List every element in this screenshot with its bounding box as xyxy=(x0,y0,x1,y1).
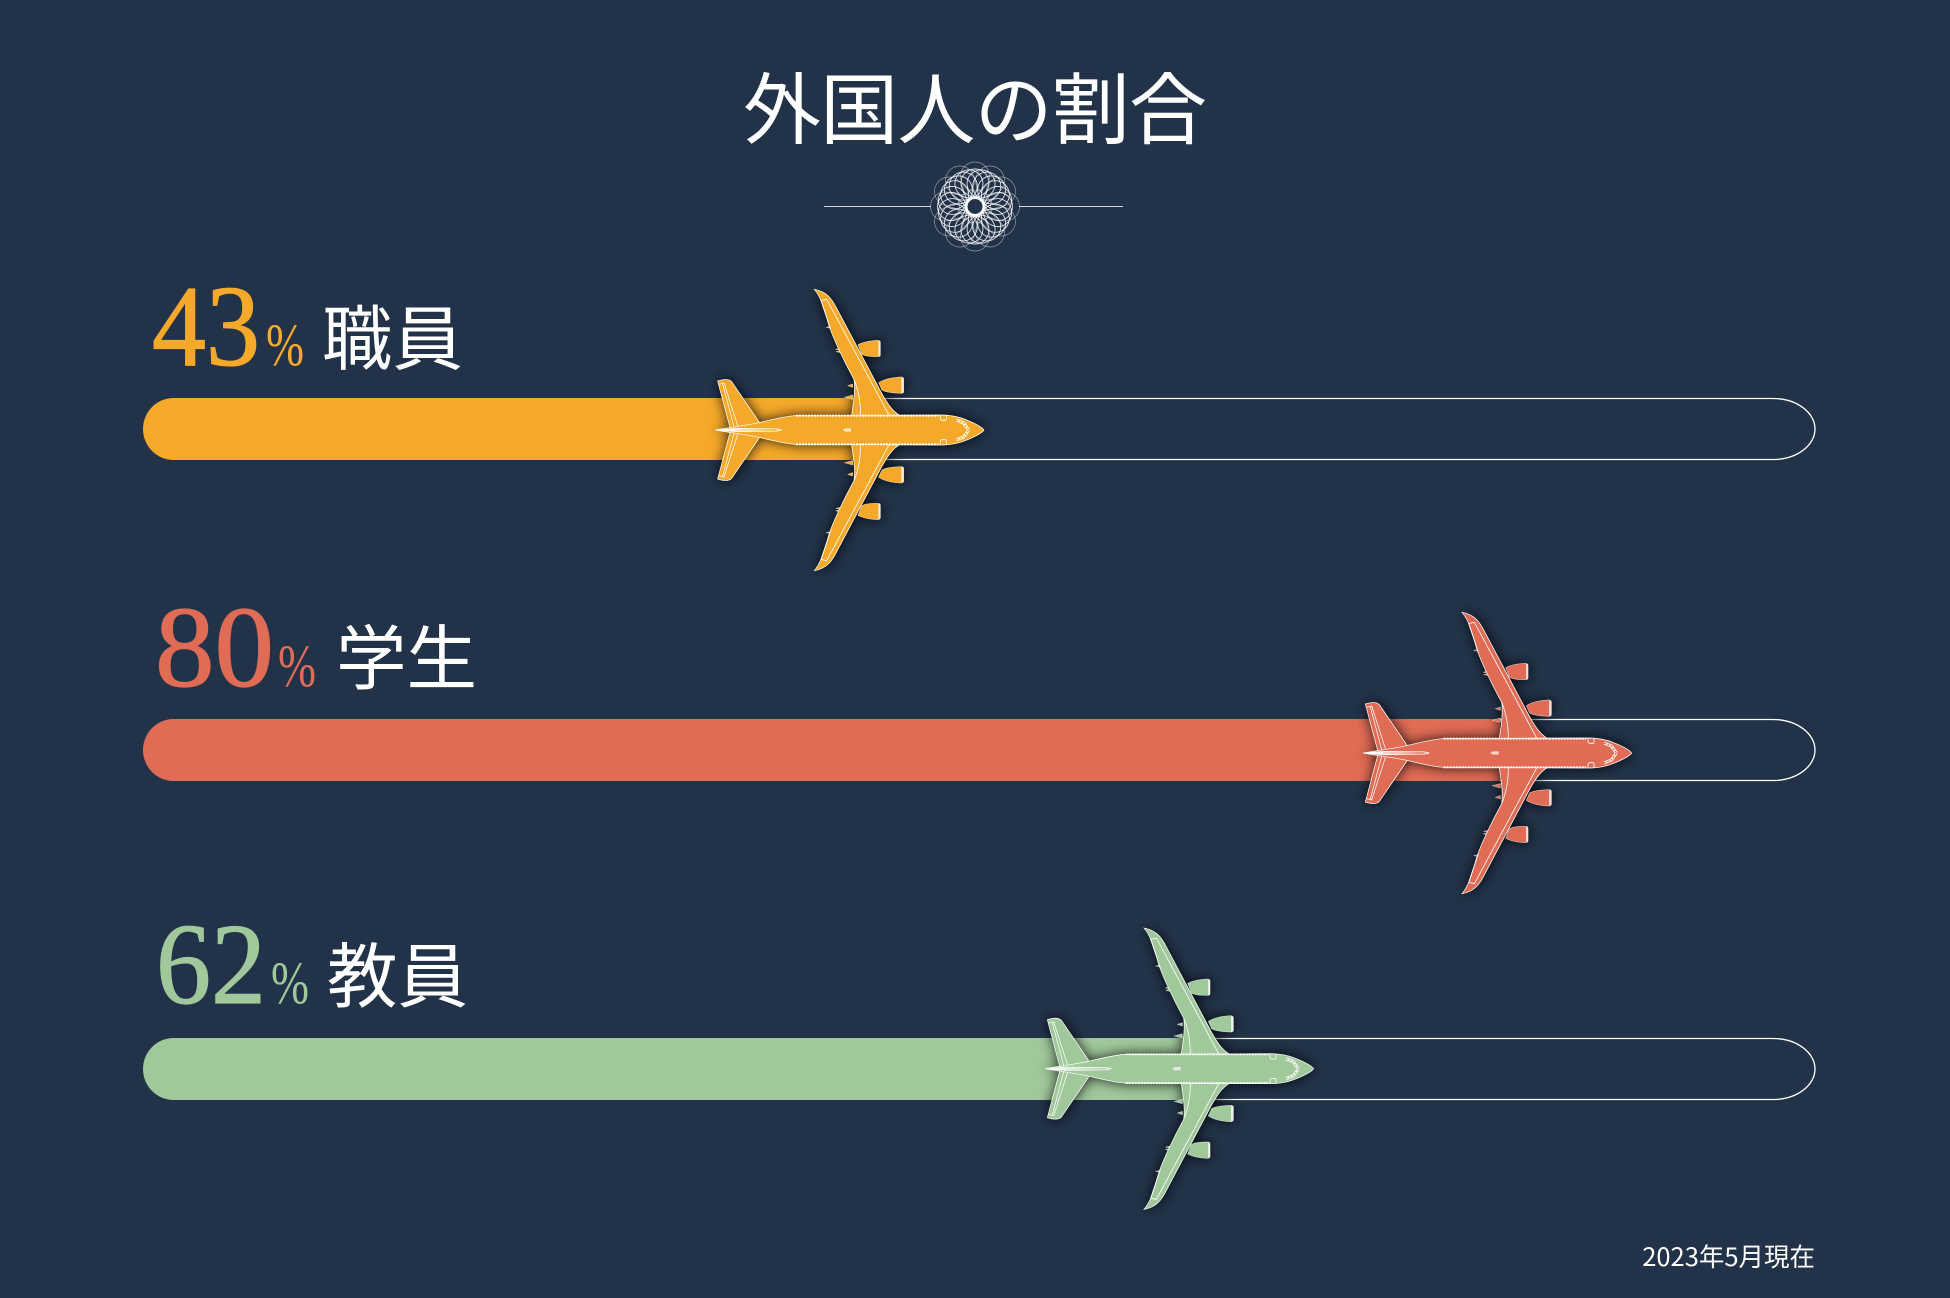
percentage: 43%: 43 xyxy=(152,263,260,390)
progress bar fill xyxy=(143,1038,1183,1100)
progress track outline xyxy=(1183,1038,1815,1100)
progress track outline xyxy=(1500,720,1815,780)
row: staff 43% xyxy=(143,263,1815,571)
label: 教員: 教員 xyxy=(327,938,468,1016)
percentage: 62%: 62 xyxy=(156,901,266,1028)
percentage: 80%: % xyxy=(278,633,316,699)
icon: airplane orange xyxy=(716,289,984,571)
ornament: rosette with divider line xyxy=(824,161,1123,252)
row: faculty 62% xyxy=(143,901,1815,1209)
footnote: date: 2023年5月現在 xyxy=(1642,1237,1815,1274)
label: 職員: 職員 xyxy=(322,300,463,379)
progress track outline xyxy=(853,398,1815,460)
title: 外国人の割合 xyxy=(743,66,1207,154)
icon: airplane red xyxy=(1363,612,1632,894)
icon: airplane green xyxy=(1045,928,1314,1209)
row: students 80% xyxy=(143,584,1815,894)
label: 学生: 学生 xyxy=(336,620,477,698)
percentage: 80%: 80 xyxy=(155,584,274,711)
progress bar fill xyxy=(143,719,1500,781)
percentage: 62%: % xyxy=(271,950,309,1016)
progress bar fill xyxy=(143,398,853,460)
percentage: 43%: % xyxy=(266,312,304,378)
